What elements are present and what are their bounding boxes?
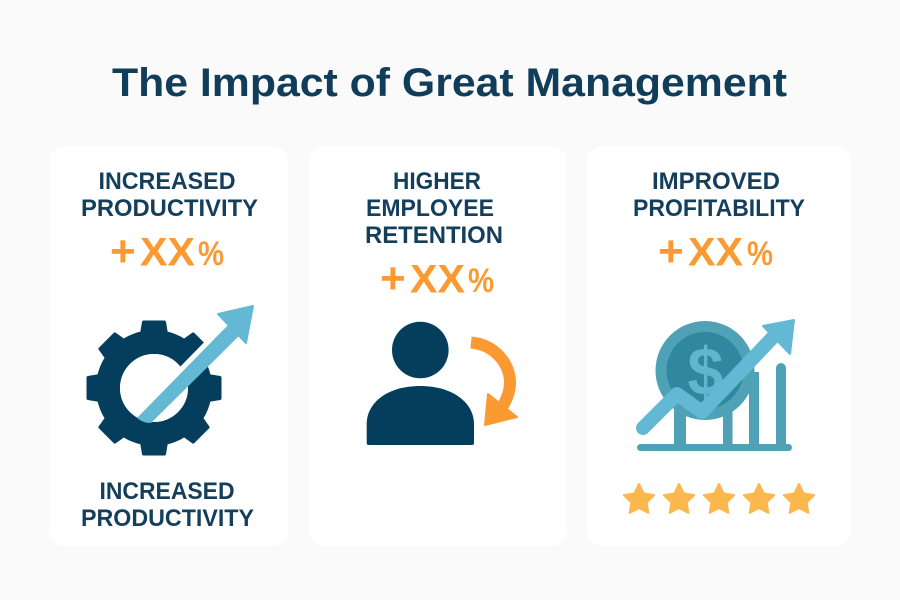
heading: improved profitability: IMPROVED	[652, 168, 780, 195]
title: The Impact of Great Management	[112, 61, 787, 105]
coin	[656, 321, 754, 420]
panel: higher employee retention	[309, 146, 567, 546]
coin: $	[688, 334, 724, 410]
metric: +XX%: %	[747, 235, 773, 273]
metric: +XX%	[380, 254, 494, 303]
panel: increased productivity	[49, 146, 288, 546]
metric: +XX%: XX	[410, 258, 465, 302]
heading: higher employee retention	[365, 168, 503, 249]
heading: increased productivity: INCREASED	[98, 168, 236, 195]
bar chart	[637, 363, 792, 451]
icon: coin and growth chart	[624, 320, 814, 513]
icon: person with retention arrow	[367, 322, 517, 445]
heading: improved profitability: PROFITABILITY	[633, 195, 805, 222]
icon: gear with rising arrow	[88, 306, 253, 454]
growth arrow	[643, 320, 794, 428]
caption: increased productivity	[81, 478, 254, 532]
metric: +XX%: XX	[140, 230, 195, 274]
metric: +XX%: +	[380, 254, 406, 303]
heading: improved profitability	[633, 168, 805, 222]
heading: higher employee retention: RETENTION	[365, 222, 503, 249]
metric: +XX%	[658, 227, 773, 276]
caption: increased productivity: INCREASED	[100, 478, 234, 505]
caption: increased productivity: PRODUCTIVITY	[81, 505, 254, 532]
heading: higher employee retention: HIGHER	[393, 168, 481, 195]
heading: increased productivity	[81, 168, 258, 222]
heading: higher employee retention: EMPLOYEE	[366, 195, 494, 222]
star rating	[624, 484, 814, 513]
metric: +XX%: +	[110, 227, 136, 276]
metric: +XX%: +	[658, 227, 684, 276]
metric: +XX%	[110, 227, 224, 276]
metric: +XX%: XX	[688, 230, 743, 274]
panel: improved profitability	[587, 146, 851, 546]
metric: +XX%: %	[198, 235, 224, 273]
metric: +XX%: %	[468, 262, 494, 300]
heading: increased productivity: PRODUCTIVITY	[81, 195, 258, 222]
